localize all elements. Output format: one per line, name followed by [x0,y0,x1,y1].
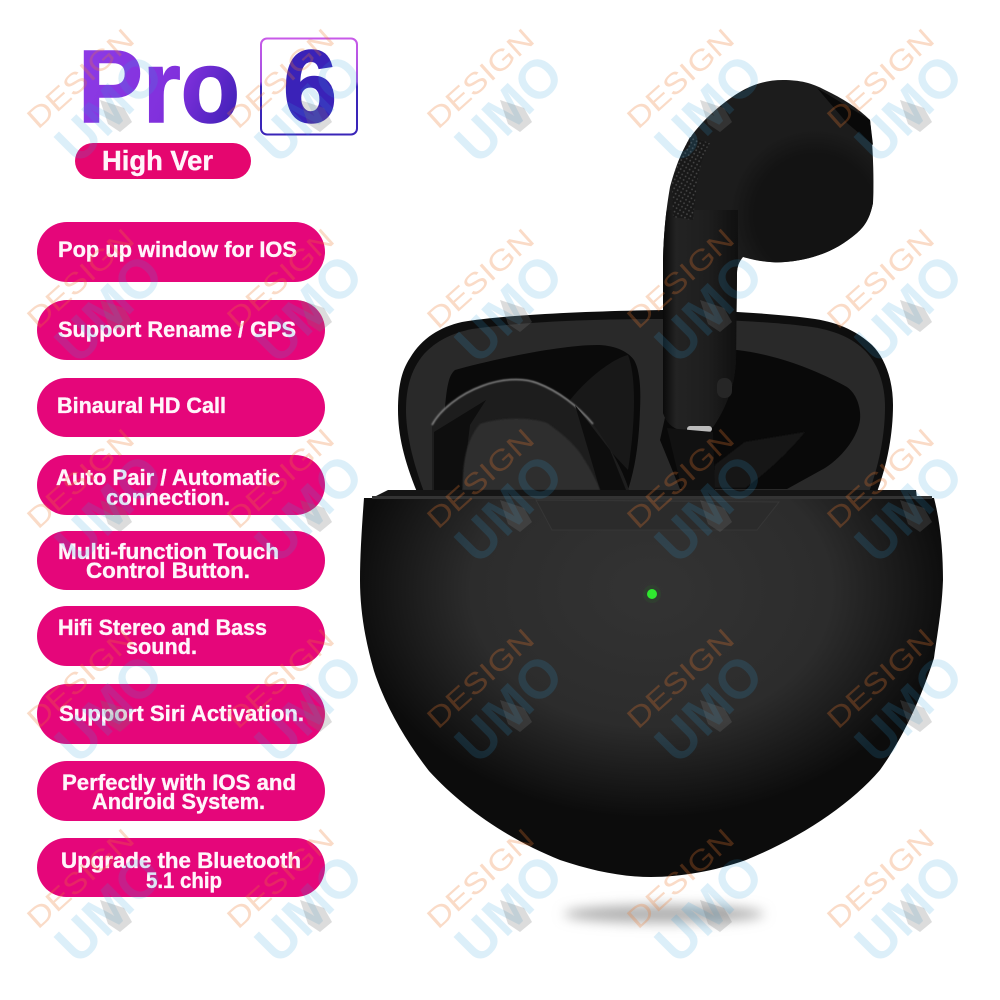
numeral 6: 6 [283,29,337,144]
status LED [643,585,661,603]
watermark layer: DESIGN [821,423,941,535]
badge: High Ver [75,143,251,179]
watermark layer: UMO [443,42,575,174]
watermark layer: UMO [243,842,375,974]
watermark layer: DESIGN [621,423,741,535]
feature pill: siri: Support Siri Activation. [59,701,304,726]
watermark layer: DESIGN [621,23,741,135]
watermark layer: UMO [43,842,175,974]
watermark layer: UMO [43,242,175,374]
earbud body [663,80,873,430]
feature pill: touch control: Multi-function Touch [58,539,279,564]
watermark layer: UMO [243,242,375,374]
watermark layer: UMO [643,442,775,574]
watermark layer: DESIGN [821,823,941,935]
watermark layer: UMO [643,242,775,374]
head inner shadow [746,151,874,262]
watermark layer: DESIGN [621,823,741,935]
watermark layer: DESIGN [421,423,541,535]
watermark layer: UMO [643,642,775,774]
watermark layer: UMO [843,42,975,174]
title: Pro 6 heading [78,29,357,144]
watermark layer: UMO [843,642,975,774]
watermark layer: DESIGN [21,623,141,735]
feature pill: rename and GPS [37,300,325,360]
product: earbuds in charging case [360,80,943,923]
feature pill: iOS and Android [37,761,325,821]
watermark layer: DESIGN [421,223,541,335]
heading word: Pro: Pro [78,29,240,144]
left earbud cavity [445,345,640,490]
earbud: lying in case [432,379,629,490]
watermark layer: UMO [843,242,975,374]
feature pill: iOS and Android: Android System. [92,789,265,814]
case base [360,490,943,877]
feature pill: pop up window: Pop up window for IOS [58,237,297,262]
top rim band [372,496,932,499]
feature pill: rename and GPS: Support Rename / GPS [58,317,296,342]
feature pill: auto pair: Auto Pair / Automatic [56,465,280,490]
feature pill: touch control [37,531,325,590]
feature pill: auto pair [37,455,325,515]
watermark layer: UMO [243,442,375,574]
feature pill: bluetooth: 5.1 chip [146,868,222,893]
stem shading [663,210,738,432]
watermark layer: DESIGN [221,823,341,935]
speaker mesh [672,137,710,220]
feature pill: HD call [37,378,325,437]
case lid tray [398,310,893,492]
watermark layer: DESIGN [221,223,341,335]
feature pill: HD call: Binaural HD Call [57,393,226,418]
watermark layer: DESIGN [21,423,141,535]
earbud: standing with stem [663,80,880,490]
feature pill: bluetooth [37,838,325,897]
watermark layer: UMO [843,842,975,974]
watermark layer: UMO [43,442,175,574]
feature pill: bluetooth: Upgrade the Bluetooth [61,848,301,873]
watermark layer: DESIGN [421,23,541,135]
right earbud cavity [660,350,860,489]
watermark layer: DESIGN [21,23,141,135]
watermark layer: UMO [443,642,575,774]
watermark layer: DESIGN [421,823,541,935]
watermark layer: UMO [443,842,575,974]
stem ring [687,426,712,432]
watermark layer: UMO [243,642,375,774]
floor shadow [564,905,764,923]
watermark layer: DESIGN [821,223,941,335]
watermark layer: UMO [43,42,175,174]
watermark layer: UMO [443,442,575,574]
head top-right dark patch [817,88,873,145]
feature pill: touch control: Control Button. [86,558,250,583]
earbud tip [463,419,600,490]
watermark layer: UMO [843,442,975,574]
feature pill: iOS and Android: Perfectly with IOS and [62,770,296,795]
watermark layer: UMO [43,642,175,774]
feature list [37,222,325,897]
watermark layer: DESIGN [421,623,541,735]
watermark layer: DESIGN [221,423,341,535]
watermark layer: DESIGN [821,23,941,135]
watermark layer: DESIGN [221,623,341,735]
feature pill: pop up window [37,222,325,282]
feature pill: hifi stereo: Hifi Stereo and Bass [58,615,267,640]
stem tip [667,428,715,490]
watermark layer: DESIGN [621,623,741,735]
reflection lower right [712,432,805,488]
watermark layer: UMO [643,42,775,174]
outlined box around 6 [261,38,357,134]
watermark layer: DESIGN [21,223,141,335]
watermark layer: UMO [443,242,575,374]
case notch [536,500,779,530]
feature pill: hifi stereo: sound. [126,634,197,659]
watermark layer: DESIGN [821,623,941,735]
stem slit [717,378,732,398]
feature pill: hifi stereo [37,606,325,666]
watermark layer: UMO [243,42,375,174]
watermark layer: UMO [643,842,775,974]
watermark layer: DESIGN [21,823,141,935]
watermark layer: DESIGN [221,23,341,135]
feature pill: auto pair: connection. [106,485,230,510]
cone highlight in left cavity [570,355,634,470]
feature pill: siri [37,684,325,744]
watermark layer: DESIGN [621,223,741,335]
badge: High Ver: High Ver [102,145,213,176]
